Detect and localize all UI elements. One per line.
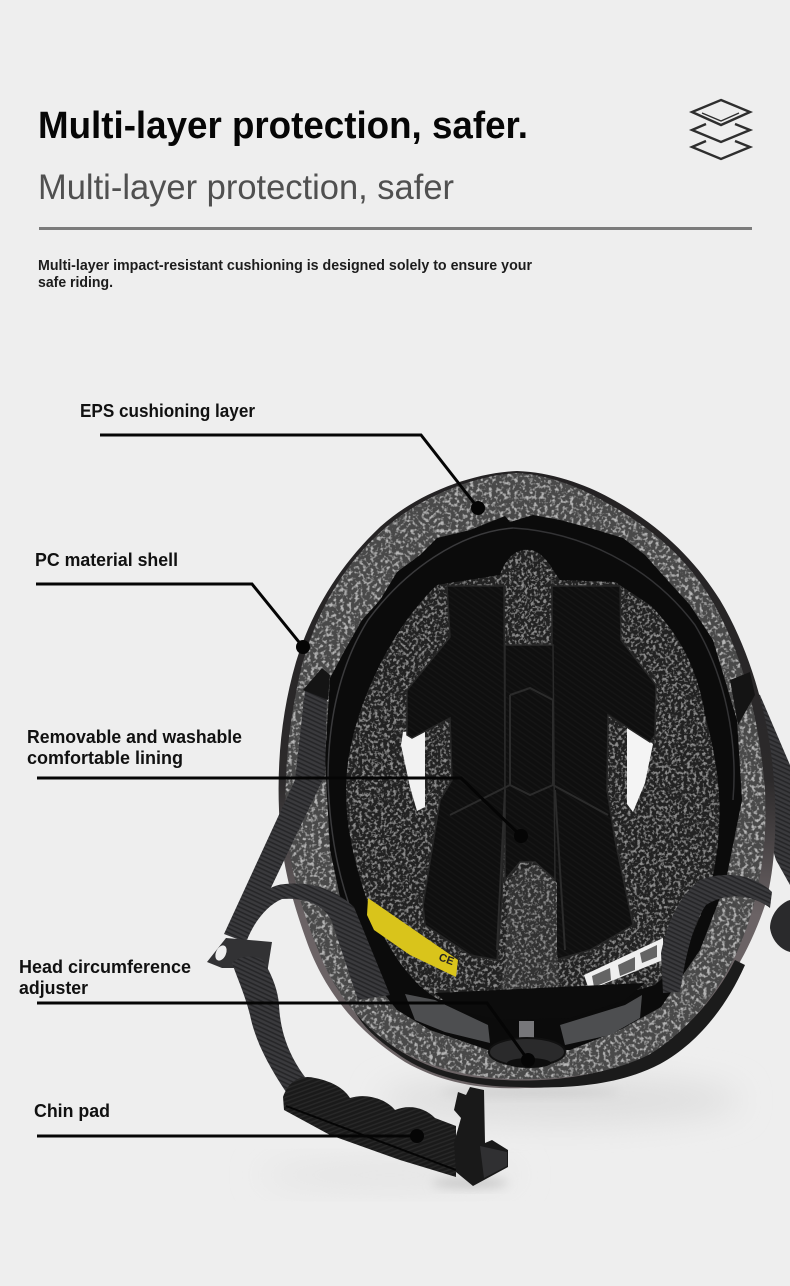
adjuster post	[519, 1021, 534, 1041]
callout: chin pad: Chin pad	[34, 1100, 110, 1121]
vent hole right	[627, 722, 653, 812]
callout: EPS cushioning layer	[80, 400, 485, 515]
left long strap	[224, 670, 327, 942]
side buckle anchor	[303, 668, 330, 700]
helmet outer shell	[279, 471, 775, 1088]
right loop strap	[661, 875, 772, 993]
description text: Multi-layer impact-resistant cushioning is designed solely to ensure your	[38, 258, 532, 274]
buckle strap wrap	[480, 1146, 507, 1178]
grey adjuster plates	[405, 994, 642, 1045]
subtitle: Multi-layer protection, safer	[38, 167, 454, 207]
center rear foam	[500, 868, 560, 992]
chin pad	[283, 1077, 456, 1177]
callout: PC material shell	[35, 549, 310, 654]
right buckle	[770, 900, 790, 952]
white label	[584, 938, 663, 990]
dial slot	[507, 1058, 551, 1068]
adjuster dial	[489, 1038, 565, 1066]
EPS foam rim	[286, 473, 766, 1079]
inner black cavity	[325, 515, 742, 1050]
callout: head circumference adjuster	[19, 956, 535, 1067]
center pad seams	[450, 688, 608, 950]
buckle opening	[213, 944, 229, 962]
vent hole left	[401, 729, 425, 811]
callout: chin pad	[34, 1100, 424, 1143]
inner foam liner	[346, 550, 719, 1000]
CE mark: CE	[437, 952, 455, 968]
left loop strap	[236, 883, 390, 1000]
callout: EPS cushioning layer: EPS cushioning layer	[80, 400, 255, 421]
description text	[38, 258, 532, 291]
callout: head circumference adjuster: adjuster	[19, 977, 88, 998]
callout: head circumference adjuster: Head circumference	[19, 956, 191, 977]
lower chin strap	[232, 957, 305, 1092]
left buckle	[207, 938, 272, 980]
right comfort pad	[552, 586, 656, 960]
callout: removable lining	[27, 726, 528, 843]
rear adjuster band	[435, 983, 645, 1020]
right strap	[733, 688, 790, 885]
description text: safe riding.	[38, 275, 113, 291]
callout: PC material shell: PC material shell	[35, 549, 178, 570]
chin buckle	[454, 1087, 508, 1186]
chin pad lower seam	[286, 1106, 456, 1170]
perforation dots	[358, 573, 681, 867]
title: Multi-layer protection, safer.	[38, 105, 528, 147]
callout: removable lining: Removable and washable	[27, 726, 242, 747]
center comfort pad	[505, 645, 555, 880]
lower shell dark rim	[352, 960, 745, 1087]
left comfort pad	[407, 586, 505, 960]
yellow warning label	[367, 898, 458, 977]
label print	[592, 945, 657, 987]
inner ring highlight	[328, 528, 513, 945]
callout: removable lining: comfortable lining	[27, 747, 183, 768]
helmet photo illustration	[207, 471, 790, 1188]
inner ring highlight right	[513, 528, 734, 800]
ground shadow	[260, 1076, 740, 1188]
right anchor	[730, 672, 755, 725]
icon: stacked layers	[692, 100, 750, 159]
